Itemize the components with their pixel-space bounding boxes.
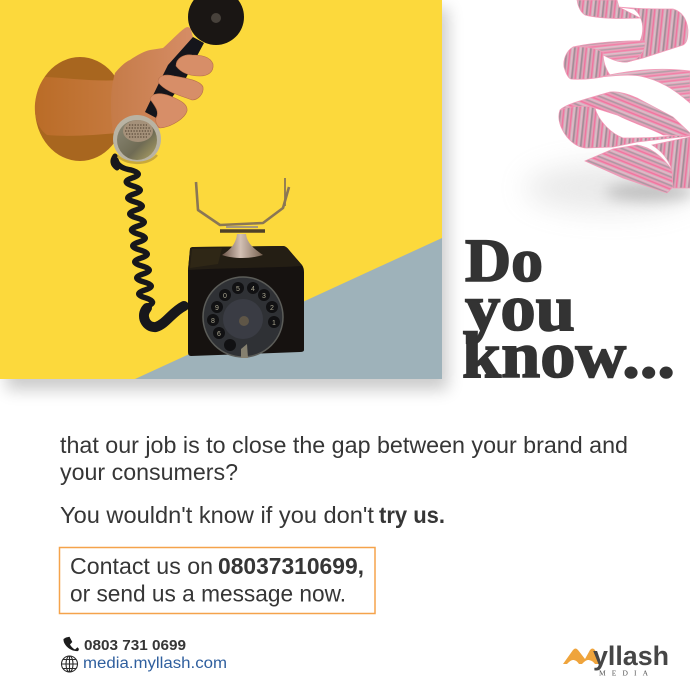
rotary dial: 1 [272, 320, 276, 327]
callout: contact box: Contact us on [70, 553, 213, 579]
upper strip [573, 41, 645, 62]
fingers [150, 55, 213, 128]
heading [462, 228, 675, 392]
illustration: pink striped ribbon [559, 0, 690, 193]
handset handle [145, 37, 204, 120]
icon: coiled telephone cord [113, 156, 184, 327]
left small loop [564, 47, 610, 79]
callout: contact box [60, 548, 375, 614]
phone body [188, 246, 304, 356]
rotary dial: 6 [217, 331, 221, 338]
logo mark [563, 648, 601, 664]
rotary dial: 9 [215, 305, 219, 312]
body line 2: your consumers? [60, 459, 238, 485]
icon: globe [62, 656, 78, 672]
hole in the wall [35, 57, 125, 161]
microphone [113, 115, 161, 163]
earpiece [188, 0, 244, 45]
illustration: rotary telephone base [188, 178, 304, 358]
emphasis: try us: try us. [379, 502, 445, 528]
logo wordmark: yllash [593, 641, 669, 671]
middle band [600, 69, 690, 103]
heading line 3: know... [462, 319, 675, 392]
big loop top strip [560, 92, 690, 136]
logo: Myllash Media [563, 641, 669, 678]
arm [35, 77, 122, 136]
rotary dial: 0 [223, 293, 227, 300]
callout: contact box: 08037310699, [218, 553, 364, 579]
big loop left face [559, 103, 690, 148]
callout: contact box: or send us a message now. [70, 580, 346, 606]
body line 1: that our job is to close the gap between your brand and [60, 432, 628, 458]
top ribbon fold [577, 0, 640, 19]
phone number: 0803 731 0699 [84, 637, 186, 654]
logo subtitle: MEDIA [599, 668, 649, 678]
rotary dial: 4 [251, 286, 255, 293]
body line 3: You wouldn't know if you don't [60, 502, 375, 528]
top face [188, 246, 302, 270]
rotary dial: 8 [211, 318, 215, 325]
panel: yellow photo background [0, 0, 442, 379]
illustration: hand holding telephone handset [35, 0, 244, 163]
blue-grey diagonal wedge [135, 238, 442, 379]
cradle [196, 178, 289, 231]
rotary dial [203, 277, 283, 358]
panel shadow [6, 8, 448, 390]
right loop [618, 7, 688, 62]
rotary dial: 5 [236, 286, 240, 293]
lowest fold [585, 145, 673, 193]
body text [60, 432, 628, 528]
icon: phone [63, 637, 79, 651]
cradle stem [222, 234, 263, 258]
hand palm [111, 27, 193, 133]
ribbon shadow [525, 164, 690, 212]
website: media.myllash.com [83, 655, 227, 672]
lower right band [652, 137, 690, 188]
rotary dial: 2 [270, 305, 274, 312]
heading line 2: you [465, 272, 575, 345]
heading line 1: Do [465, 228, 543, 295]
rotary dial: 3 [262, 293, 266, 300]
